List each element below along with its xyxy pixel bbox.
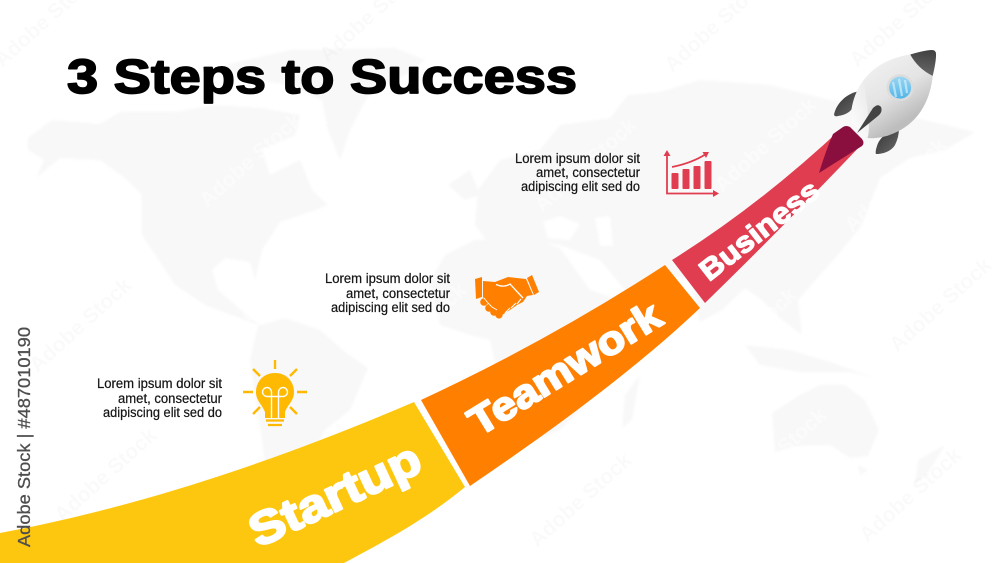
step 3 description: amet, consectetur (536, 165, 640, 180)
fin: left (834, 91, 861, 116)
watermarks: Adobe Stock (840, 133, 951, 237)
icon: growth chart (664, 150, 719, 197)
band: Business: Business (694, 174, 826, 288)
watermarks: Adobe Stock (710, 93, 821, 197)
step 2 description: Lorem ipsum dolor sit (325, 271, 450, 286)
band: Startup (0, 402, 465, 563)
step 1 description: Lorem ipsum dolor sit (97, 376, 222, 391)
watermarks: Adobe Stock (195, 108, 306, 212)
watermarks: Adobe Stock (370, 78, 481, 182)
watermarks: Adobe Stock (225, 233, 336, 337)
rocket (819, 29, 958, 173)
watermarks: Adobe Stock (720, 403, 831, 507)
fin: right (876, 128, 899, 154)
icon: light bulb (243, 360, 307, 425)
step 3 description: adipiscing elit sed do (521, 179, 640, 194)
step 2 description (325, 271, 450, 315)
rocket body (836, 29, 958, 153)
band: Teamwork (421, 265, 700, 486)
step 1 description (97, 376, 222, 420)
step 2 description: adipiscing elit sed do (331, 300, 450, 315)
watermarks: Adobe Stock (530, 113, 641, 217)
band: Startup: Startup (240, 432, 429, 557)
step 3 description (515, 151, 640, 194)
step 1 description: amet, consectetur (118, 391, 222, 406)
step 3 description: Lorem ipsum dolor sit (515, 151, 640, 166)
stock id: Adobe Stock | #487010190 (14, 327, 34, 547)
icon: handshake (475, 275, 539, 319)
band: Business (672, 127, 863, 303)
watermarks: Adobe Stock (690, 283, 801, 387)
rocket window stripes (893, 79, 907, 97)
rocket exhaust (819, 126, 864, 173)
watermarks: Adobe Stock (360, 278, 471, 382)
step 1 description: adipiscing elit sed do (103, 405, 222, 420)
title: 3 Steps to Success (67, 51, 577, 104)
band: Teamwork: Teamwork (461, 293, 670, 445)
rocket vent (857, 105, 882, 133)
step 2 description: amet, consectetur (346, 286, 450, 301)
